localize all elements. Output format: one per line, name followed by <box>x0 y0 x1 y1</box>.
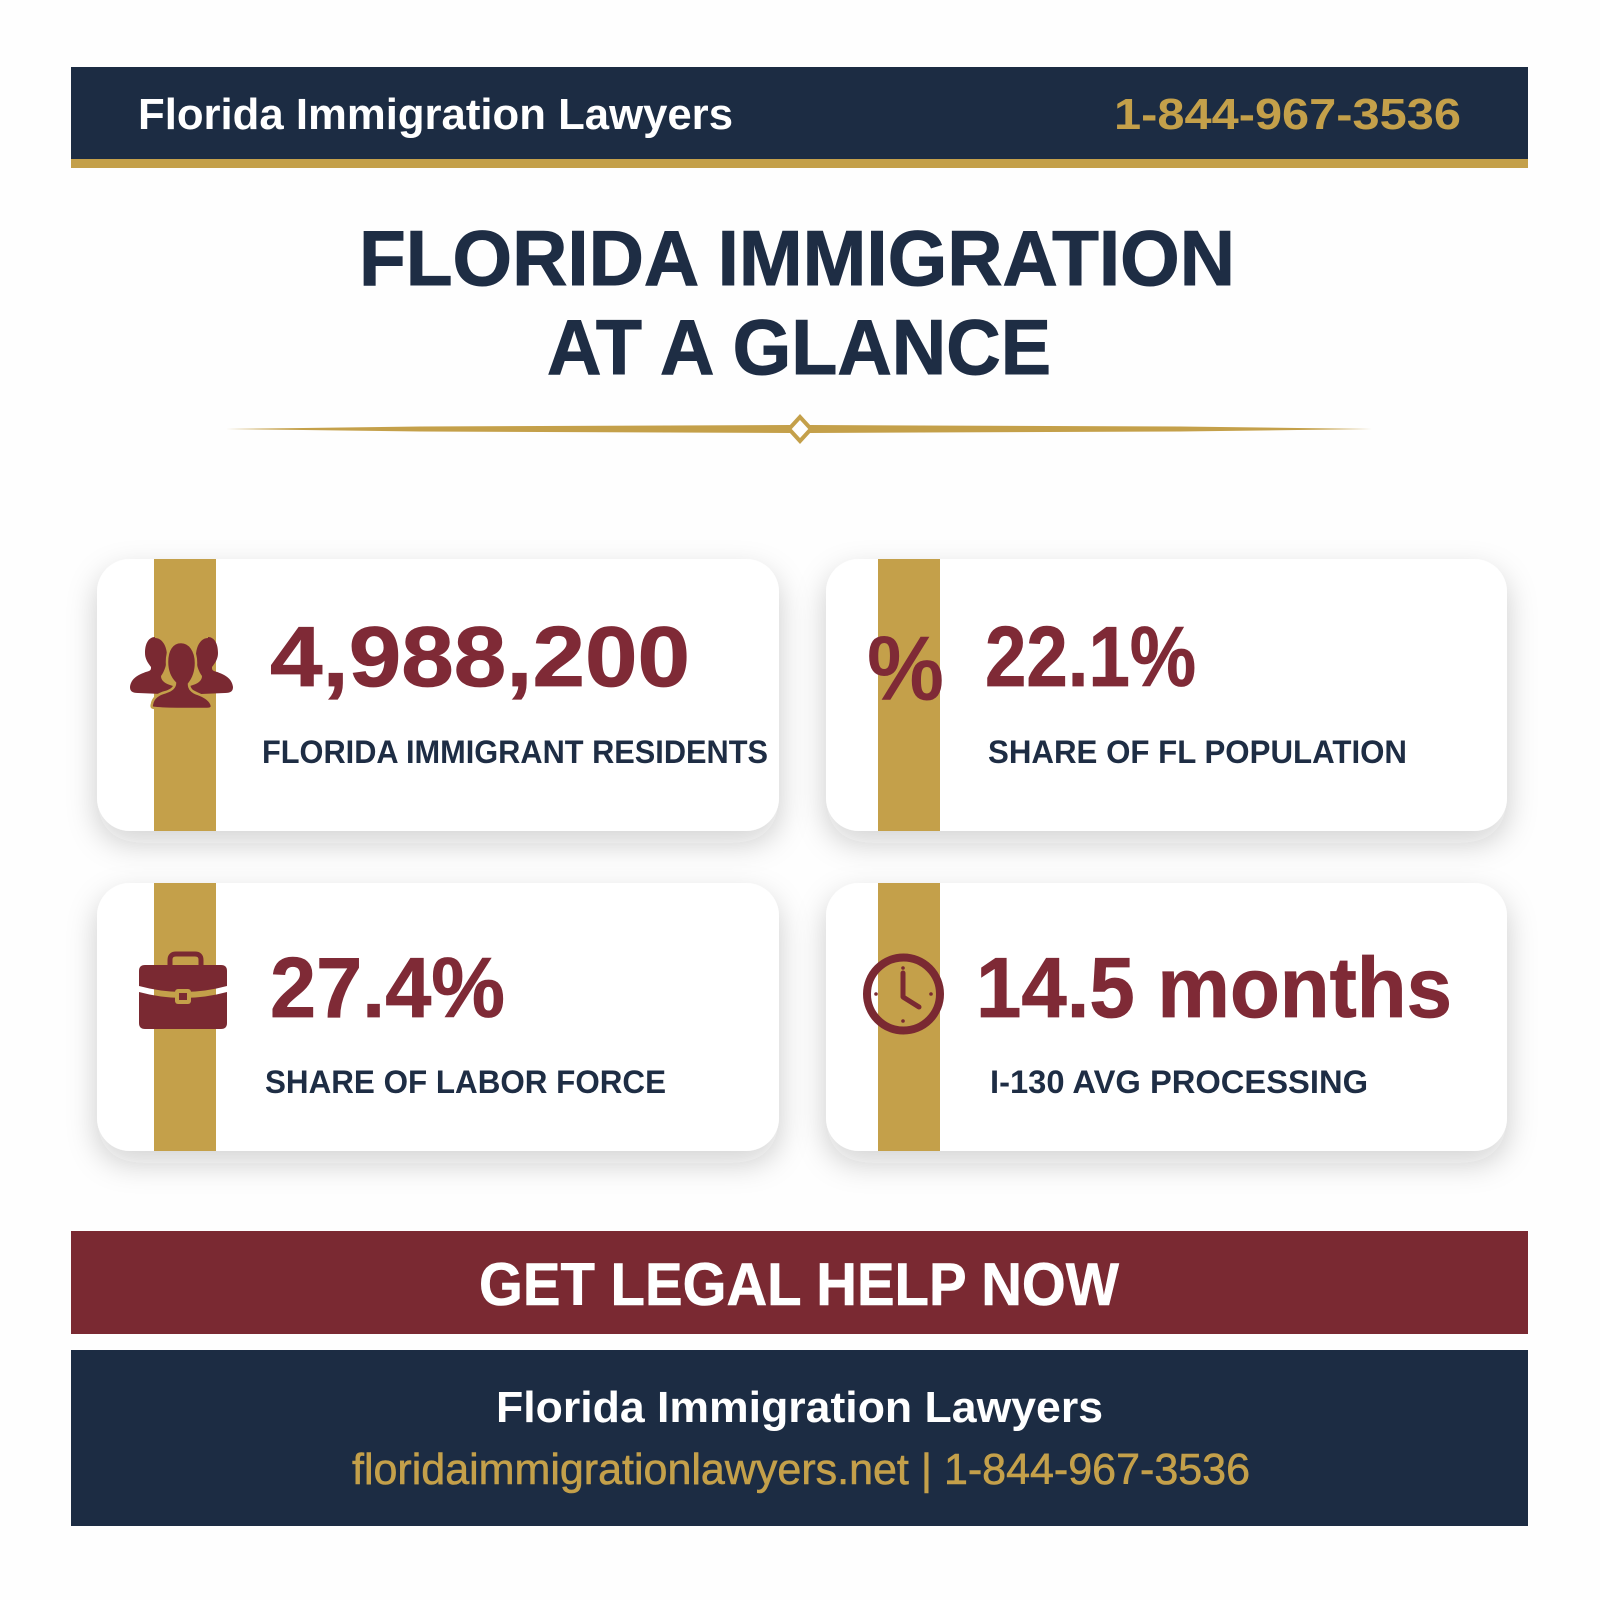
title: FLORIDA IMMIGRATION <box>359 214 1235 302</box>
icon: briefcase <box>139 954 227 1029</box>
stat value: 22.1% <box>985 610 1196 705</box>
icon: percent: % <box>867 618 944 720</box>
panel: share of FL population <box>826 559 1507 831</box>
panel: Florida immigrant residents <box>97 559 779 831</box>
header bar <box>71 67 1528 168</box>
stat label: FLORIDA IMMIGRANT RESIDENTS <box>262 734 768 770</box>
title <box>359 214 1235 391</box>
header phone: 1-844-967-3536 <box>1114 90 1461 139</box>
footer website and phone: floridaimmigrationlawyers.net | 1-844-967-3536 <box>352 1445 1250 1494</box>
call to action banner <box>71 1231 1528 1334</box>
panel: I-130 average processing <box>826 883 1507 1151</box>
title: AT A GLANCE <box>547 303 1051 391</box>
stat value: 4,988,200 <box>270 610 690 705</box>
stat label: SHARE OF FL POPULATION <box>988 734 1407 770</box>
stat label: I-130 AVG PROCESSING <box>990 1064 1368 1100</box>
icon: people <box>130 637 233 709</box>
panel: share of labor force <box>97 883 779 1151</box>
title divider with diamond <box>226 417 1372 441</box>
stat value: 14.5 months <box>976 941 1452 1036</box>
stat value: 27.4% <box>270 941 505 1036</box>
stat label: SHARE OF LABOR FORCE <box>265 1064 666 1100</box>
call to action banner: GET LEGAL HELP NOW <box>479 1251 1119 1318</box>
header firm name: Florida Immigration Lawyers <box>138 90 733 139</box>
icon: clock <box>867 958 940 1030</box>
footer firm name: Florida Immigration Lawyers <box>496 1383 1103 1432</box>
footer <box>71 1350 1528 1526</box>
